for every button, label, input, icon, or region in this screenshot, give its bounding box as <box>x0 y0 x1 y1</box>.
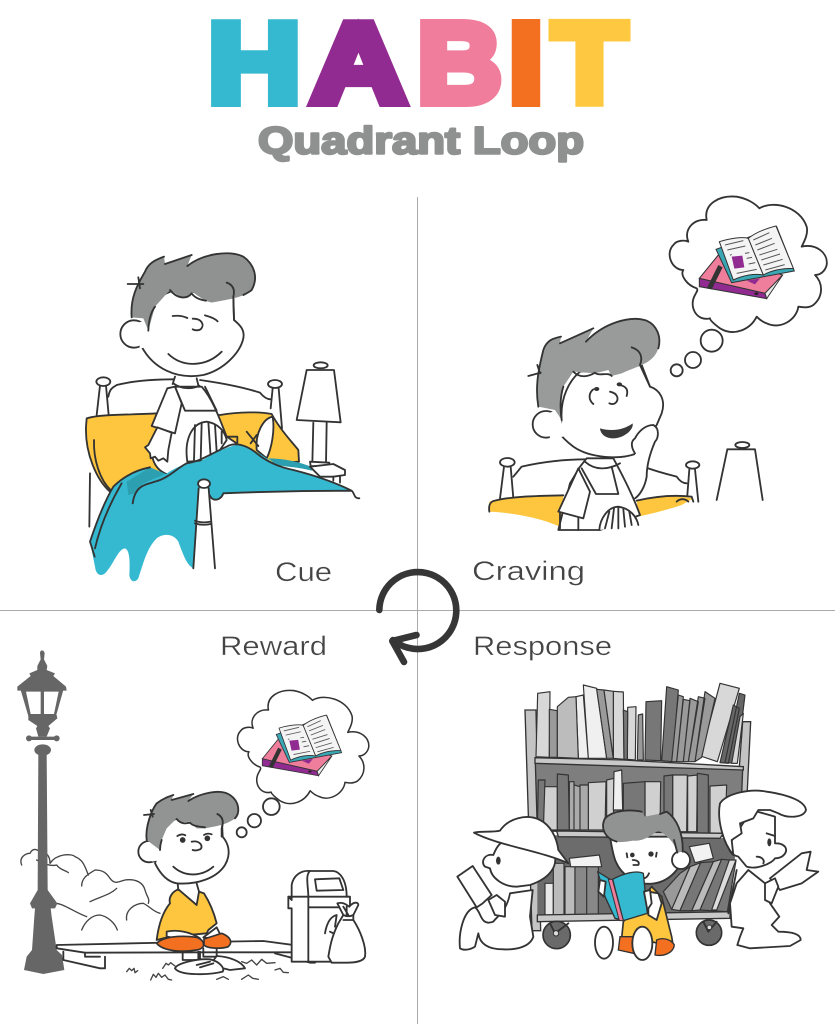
lamp shade <box>717 442 763 500</box>
bottom row books <box>545 843 736 915</box>
bed headboard <box>89 377 282 527</box>
thought bubble with books <box>670 196 827 376</box>
garbage bag <box>325 903 365 963</box>
book cart <box>525 683 751 931</box>
bedside lamp and table <box>297 362 345 483</box>
child head <box>610 837 683 884</box>
panel: response illustration <box>457 683 818 960</box>
label: Cue: Cue <box>275 557 332 587</box>
boy on bench <box>138 792 245 974</box>
boy head <box>155 815 229 884</box>
boy head <box>558 365 663 457</box>
trash can <box>288 871 350 962</box>
label: Craving: Craving <box>472 556 585 586</box>
child with book in center <box>595 810 690 960</box>
teal blanket <box>90 444 352 581</box>
title: HABIT: T <box>552 0 626 126</box>
middle row books <box>537 770 727 833</box>
label: Response: Response <box>473 631 612 661</box>
child standing reading <box>719 791 818 948</box>
top row books <box>536 683 745 763</box>
bench <box>57 941 318 968</box>
cart wheels <box>543 920 722 949</box>
title: HABIT: H <box>208 0 301 126</box>
boy thinking <box>528 319 663 530</box>
lamp post <box>17 650 67 974</box>
boy head <box>142 290 244 376</box>
bed and pillow <box>489 458 699 527</box>
subtitle: Quadrant Loop: Quadrant Loop <box>258 120 584 162</box>
grass tufts <box>127 959 288 980</box>
boy sleeping <box>94 253 273 490</box>
yellow pillow <box>86 412 299 492</box>
bushes <box>21 849 160 930</box>
title: HABIT: I <box>509 0 543 126</box>
title: HABIT: A <box>311 0 406 126</box>
label: Reward: Reward <box>220 631 327 661</box>
panel: cue illustration <box>86 253 359 581</box>
title: HABIT <box>208 0 626 126</box>
panel: reward illustration <box>17 650 369 980</box>
title: HABIT: B <box>418 0 502 126</box>
bed foot post <box>193 479 215 568</box>
child with cap reading <box>457 817 568 950</box>
panel: craving illustration <box>489 196 827 530</box>
thought bubble with books <box>237 690 369 837</box>
loop arrow <box>379 572 456 662</box>
